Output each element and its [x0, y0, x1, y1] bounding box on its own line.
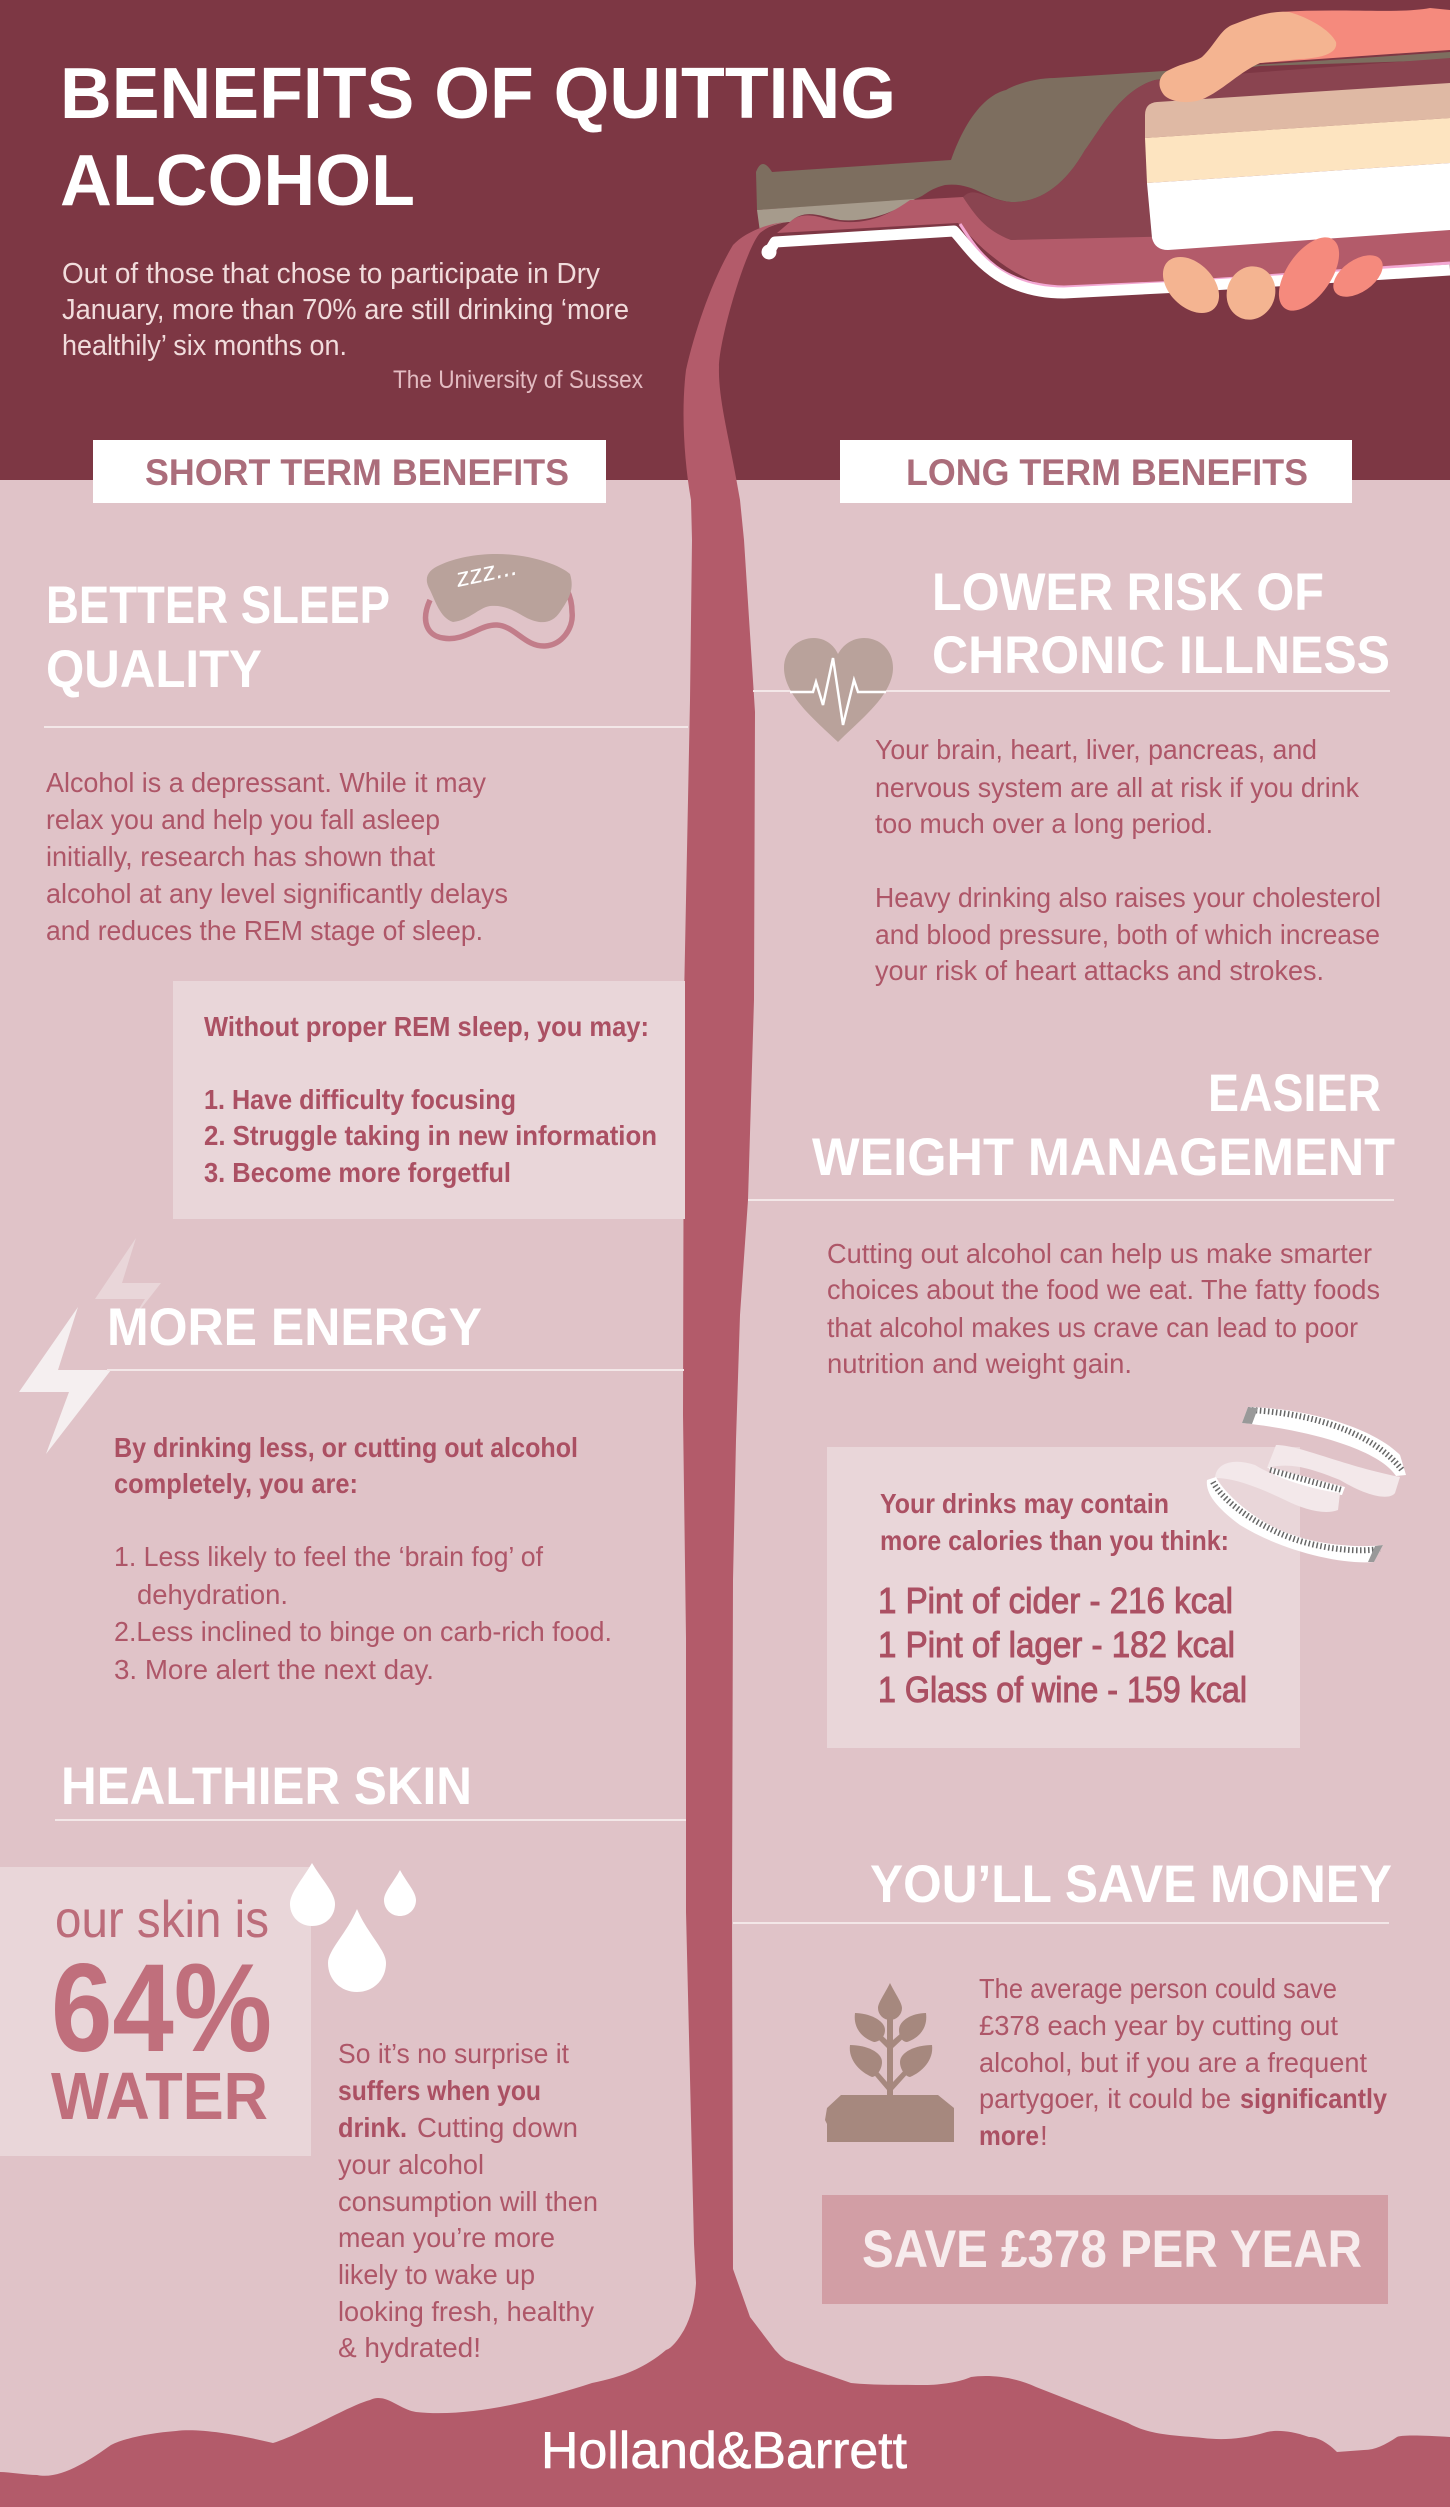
body text: So it’s no surprise it [338, 2038, 569, 2069]
body text [338, 2038, 598, 2363]
panel: healthier skin [0, 1757, 686, 2363]
body text: nervous system are all at risk if you drink [875, 772, 1360, 803]
heading: HEALTHIER SKIN [61, 1757, 472, 1816]
body text: £378 each year by cutting out [979, 2010, 1338, 2041]
numbered list: 3. More alert the next day. [114, 1654, 434, 1685]
body text: Your brain, heart, liver, pancreas, and [875, 734, 1317, 765]
bottle white edge [769, 231, 1450, 293]
intro bold text: completely, you are: [114, 1468, 358, 1499]
body text: consumption will then [338, 2186, 598, 2217]
body text [875, 734, 1381, 986]
body text: alcohol at any level significantly delays [46, 878, 508, 909]
callout: REM sleep: 3. Become more forgetful [204, 1157, 511, 1188]
title [60, 54, 896, 221]
bottle pink edge [960, 224, 1450, 287]
body text: & hydrated! [338, 2332, 481, 2363]
callout: drink calories [827, 1447, 1300, 1748]
body text: more [979, 2120, 1039, 2151]
panel: more energy [19, 1238, 684, 1685]
panel: easier weight management [748, 1064, 1406, 1748]
banner: short term benefits: SHORT TERM BENEFITS [145, 452, 569, 493]
callout: save per year: SAVE £378 PER YEAR [862, 2220, 1362, 2279]
panel: you'll save money [733, 1855, 1392, 2304]
banner: short term benefits [93, 440, 606, 503]
icon: sleep mask [426, 551, 572, 646]
body text: initially, research has shown that [46, 841, 435, 872]
bottle glass [756, 52, 1450, 210]
body text: choices about the food we eat. The fatty foods [827, 1274, 1380, 1305]
hand: thumb [1159, 12, 1336, 102]
icon: measuring tape [1207, 1407, 1406, 1562]
hand: fingers [1152, 227, 1390, 327]
callout: drink calories: 1 Pint of lager - 182 kcal [878, 1624, 1235, 1665]
body text: Cutting down [417, 2112, 578, 2143]
body text: your alcohol [338, 2149, 484, 2180]
body text: partygoer, it could be [979, 2083, 1231, 2114]
bottle neck highlight [757, 199, 915, 232]
body text: The average person could save [979, 1973, 1337, 2004]
body text: Cutting out alcohol can help us make smarter [827, 1238, 1372, 1269]
body text: and blood pressure, both of which increase [875, 919, 1380, 950]
callout: drink calories: Your drinks may contain [880, 1488, 1169, 1519]
body text: mean you’re more [338, 2222, 555, 2253]
body text [979, 1973, 1387, 2151]
icon: large lightning bolt [19, 1307, 111, 1454]
numbered list [114, 1541, 612, 1685]
panel: lower risk of chronic illness [753, 563, 1390, 986]
heading [812, 1064, 1395, 1187]
stat box: 64% water: WATER [51, 2059, 268, 2134]
intro text: Out of those that chose to participate in Dry [62, 258, 600, 290]
intro bold text [114, 1432, 578, 1499]
logo: Holland & Barrett: Holland&Barrett [541, 2422, 908, 2480]
heading: MORE ENERGY [107, 1298, 482, 1357]
banner: long term benefits: LONG TERM BENEFITS [906, 452, 1308, 493]
header background [0, 0, 1450, 480]
intro text [62, 258, 643, 394]
body text: ! [1040, 2120, 1048, 2151]
body text: looking fresh, healthy [338, 2296, 594, 2327]
body text: drink. [338, 2112, 407, 2143]
body text: your risk of heart attacks and strokes. [875, 955, 1324, 986]
icon: water drops [290, 1863, 416, 1992]
bottle lip dot [762, 244, 776, 260]
stat box: 64% water [0, 1867, 311, 2156]
callout: REM sleep [173, 981, 685, 1219]
heading [46, 576, 390, 699]
intro text: healthily’ six months on. [62, 330, 347, 362]
callout: drink calories: 1 Pint of cider - 216 kcal [878, 1580, 1233, 1621]
body text: alcohol, but if you are a frequent [979, 2047, 1367, 2078]
heading: WEIGHT MANAGEMENT [812, 1128, 1395, 1187]
banner: long term benefits [840, 440, 1352, 503]
wine inside bottle [777, 197, 1450, 290]
callout: REM sleep: 2. Struggle taking in new information [204, 1120, 657, 1151]
source credit: The University of Sussex [393, 366, 643, 394]
illustration: hand pouring wine bottle [756, 8, 1450, 327]
body text: Heavy drinking also raises your cholesterol [875, 882, 1381, 913]
body text: too much over a long period. [875, 808, 1213, 839]
icon: small lightning bolt [95, 1238, 161, 1320]
callout: REM sleep: 1. Have difficulty focusing [204, 1084, 516, 1115]
title: BENEFITS OF QUITTING [60, 54, 896, 134]
intro bold text: By drinking less, or cutting out alcohol [114, 1432, 578, 1463]
intro text: January, more than 70% are still drinking ‘more [62, 294, 629, 326]
hand: arm [1260, 8, 1450, 63]
callout: drink calories: 1 Glass of wine - 159 kcal [878, 1669, 1247, 1710]
callout: save per year [822, 2195, 1388, 2304]
body text: likely to wake up [338, 2259, 535, 2290]
callout: REM sleep: Without proper REM sleep, you may: [204, 1011, 649, 1042]
heading: LOWER RISK OF [932, 563, 1324, 622]
icon: heart with pulse [784, 638, 893, 742]
heading: EASIER [1208, 1064, 1381, 1123]
body text: significantly [1240, 2083, 1387, 2114]
icon: plant in pile of money [825, 1983, 954, 2142]
heading: CHRONIC ILLNESS [932, 626, 1390, 685]
heading: BETTER SLEEP [46, 576, 390, 635]
title: ALCOHOL [60, 141, 415, 221]
heading: QUALITY [46, 640, 262, 699]
body text: relax you and help you fall asleep [46, 804, 440, 835]
body text [46, 767, 508, 946]
body text: nutrition and weight gain. [827, 1348, 1132, 1379]
icon: sleep mask: zzz... [452, 551, 520, 593]
body text: Alcohol is a depressant. While it may [46, 767, 486, 798]
heading: YOU’LL SAVE MONEY [870, 1855, 1392, 1914]
numbered list: 2.Less inclined to binge on carb-rich food. [114, 1616, 612, 1647]
bottle interior [963, 58, 1450, 240]
body text: suffers when you [338, 2075, 541, 2106]
callout: drink calories: more calories than you think: [880, 1525, 1229, 1556]
bottle label [1145, 83, 1450, 250]
numbered list: 1. Less likely to feel the ‘brain fog’ of [114, 1541, 543, 1572]
numbered list: dehydration. [137, 1579, 288, 1610]
heading [932, 563, 1390, 685]
body text [827, 1238, 1380, 1379]
stat box: 64% water: our skin is [55, 1891, 269, 1949]
panel: better sleep quality [44, 551, 688, 1219]
body text: and reduces the REM stage of sleep. [46, 915, 483, 946]
body text: that alcohol makes us crave can lead to poor [827, 1312, 1358, 1343]
stat box: 64% water: 64% [51, 1939, 272, 2078]
